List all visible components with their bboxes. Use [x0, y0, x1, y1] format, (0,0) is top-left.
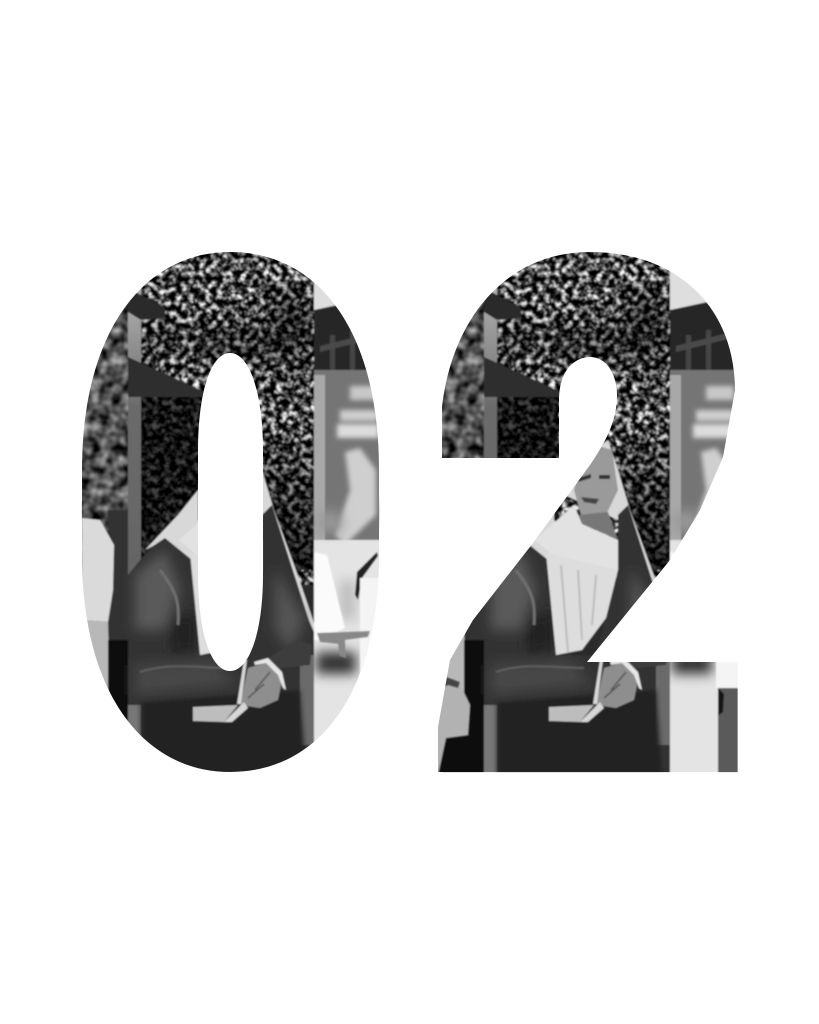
number 02 filled with black and white photo: [70, 240, 746, 780]
digit 2 with photo fill: [426, 240, 746, 780]
digit 0 with photo fill: [82, 252, 380, 772]
